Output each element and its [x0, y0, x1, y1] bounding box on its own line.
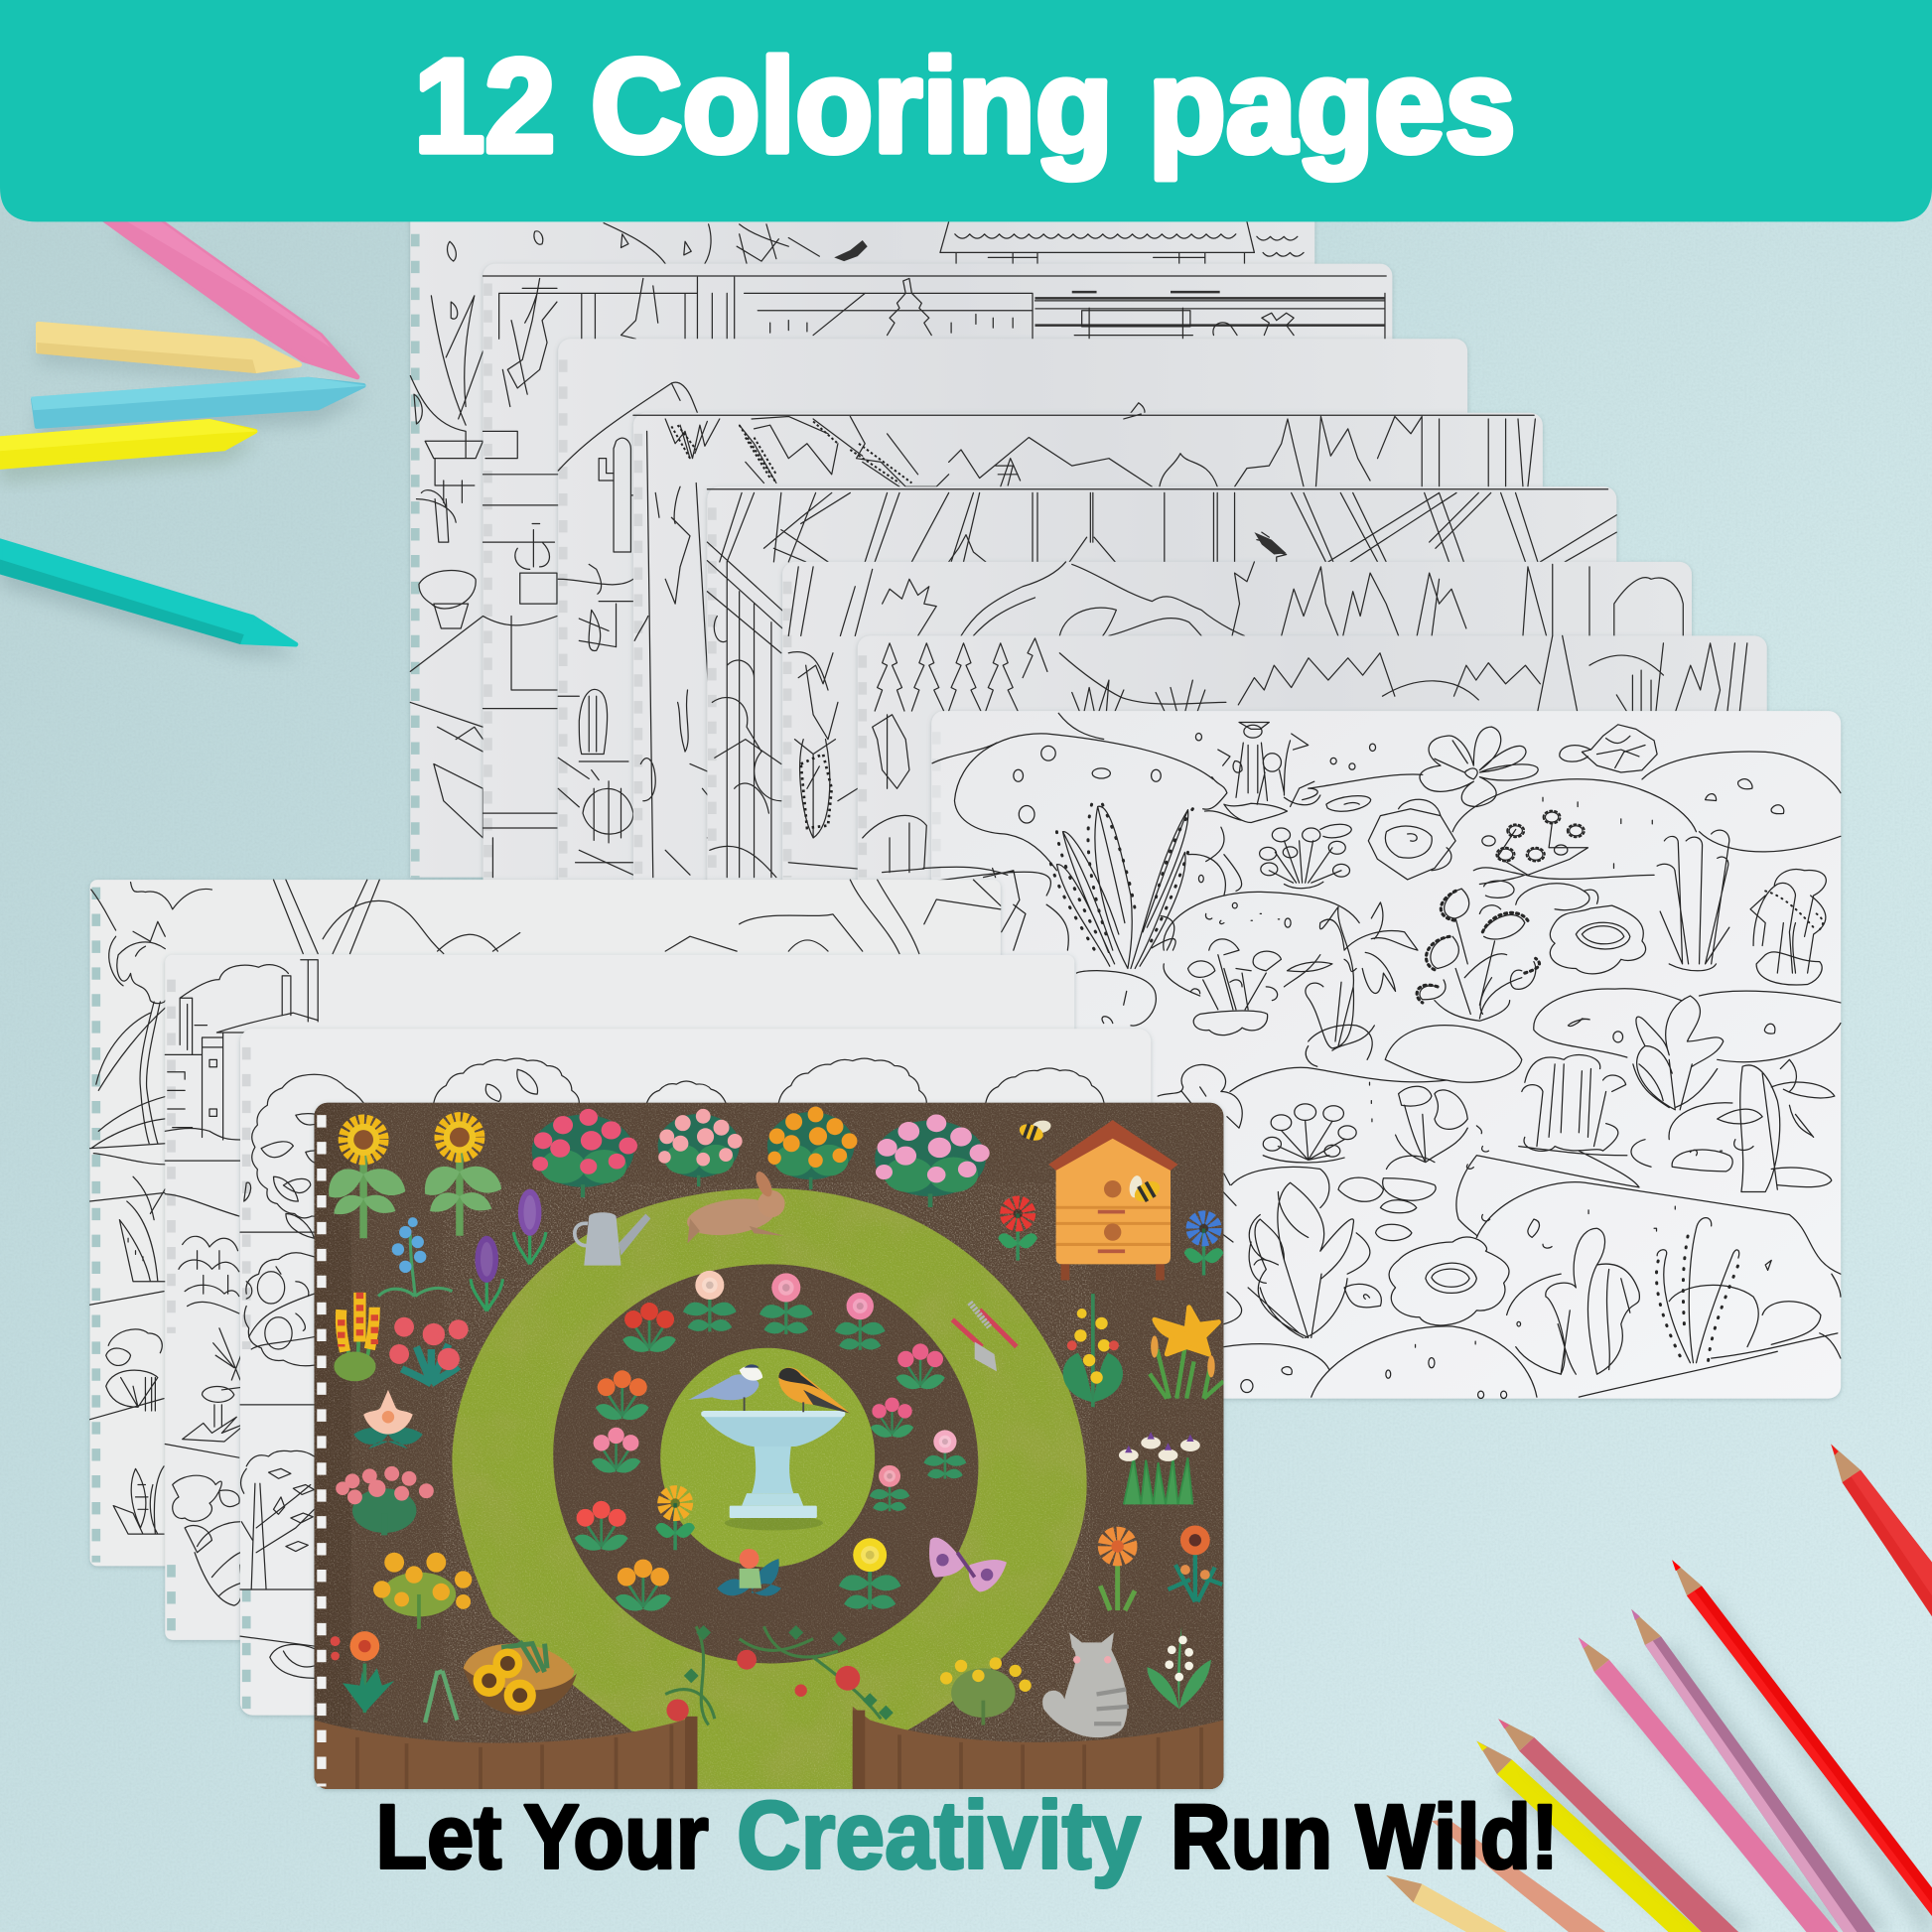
icon: hyacinth upper — [514, 1189, 546, 1264]
icon: blue flower top right — [1184, 1217, 1223, 1276]
page 12: colored garden page — [314, 1103, 1223, 1789]
succulent and flower — [1368, 799, 1455, 880]
icon: bird bath — [701, 1411, 845, 1530]
icon: forget-me-not — [378, 1217, 452, 1297]
page 2: greenhouse windows and bench — [483, 264, 1392, 950]
page 9: palm trees and hills — [90, 880, 1001, 1566]
pencil: mauve — [1631, 1609, 1891, 1932]
icon: bee on hive — [1119, 1166, 1164, 1208]
venus flytrap cluster — [1473, 812, 1587, 885]
crayons group — [0, 219, 369, 658]
back stack of coloring pages — [410, 191, 1841, 1399]
bottom contour — [1224, 1274, 1841, 1399]
icon: watering can — [575, 1212, 650, 1266]
rocks center and right — [1452, 752, 1841, 879]
pencil: salmon — [1432, 1819, 1605, 1932]
pencils group — [1386, 1445, 1932, 1932]
tagline: Let Your — [376, 1786, 709, 1887]
icon: white iris clump — [1119, 1432, 1200, 1504]
center green lawn — [660, 1348, 875, 1568]
page 7: pine forest and mountains — [858, 635, 1767, 1322]
sundew low — [1263, 1104, 1356, 1163]
icon: inner ring flowers — [575, 1271, 966, 1611]
icon: pink shrub — [658, 1109, 743, 1186]
icon: orange lily — [1150, 1308, 1223, 1399]
icon: pink flower cluster left — [336, 1466, 434, 1535]
big rock bottom right — [1476, 1182, 1841, 1274]
pencil: rose — [1498, 1719, 1756, 1932]
venus flytrap — [1420, 889, 1536, 1021]
icon: oriole bird — [778, 1367, 850, 1414]
sundew ball plant — [1260, 824, 1351, 889]
top banner — [0, 0, 1932, 221]
mushroom pitcher group — [1188, 939, 1281, 1035]
sundew plant — [1056, 806, 1188, 968]
crayon: light blue — [31, 377, 367, 441]
icon: rose bush — [532, 1109, 637, 1197]
fungi — [1546, 1228, 1639, 1374]
grass and ring speckle overlay — [444, 1182, 1090, 1789]
icon: poppy bottom left — [331, 1631, 394, 1713]
icon: yellow shrub bottom right — [940, 1657, 1032, 1725]
icon: lily of the valley — [1147, 1626, 1211, 1709]
pencil: pink — [1579, 1637, 1855, 1932]
tagline: Creativity — [737, 1780, 1141, 1888]
icon: sunflower right — [425, 1119, 501, 1236]
fence left — [314, 1717, 697, 1789]
page 11: round trees — [240, 1029, 1151, 1716]
fern — [1657, 1218, 1739, 1363]
flytrap low — [1396, 1086, 1467, 1163]
icon: lotus — [353, 1390, 423, 1449]
pitcher plants right — [1657, 830, 1822, 985]
pencil: cream — [1386, 1875, 1507, 1932]
calla bottom — [1248, 1182, 1353, 1337]
rafflesia bottom — [1389, 1237, 1509, 1325]
page 10: city buildings and garden — [165, 955, 1074, 1640]
nepenthes plant — [1287, 902, 1418, 1048]
pebbles — [1231, 1156, 1639, 1241]
icon: beehive — [1048, 1120, 1177, 1280]
icon: pruning shears — [425, 1671, 457, 1723]
inner soil ring — [553, 1264, 978, 1663]
icon: red rose cluster — [389, 1317, 469, 1384]
rocks mid right — [1534, 989, 1841, 1062]
icon: yellow shrub left — [373, 1553, 472, 1629]
icon: hyacinth lower — [471, 1236, 502, 1311]
pencil: yellow — [1476, 1741, 1719, 1932]
green spiral path — [444, 1182, 1097, 1789]
fence right — [853, 1707, 1223, 1789]
icon: gladiolus — [334, 1293, 376, 1381]
icon: red poppy lower right — [1169, 1525, 1222, 1601]
icon: orange shrub — [767, 1107, 857, 1189]
crayon: pink — [103, 219, 369, 387]
crayon: teal — [0, 541, 300, 658]
tagline — [376, 1780, 1559, 1888]
calla plant — [1633, 996, 1724, 1110]
crayon: yellow — [0, 419, 259, 483]
title: 12 Coloring pages — [414, 33, 1516, 181]
spiral binding holes on colored page — [318, 1115, 326, 1787]
icon: grey cat — [1042, 1632, 1129, 1737]
page 6: wooded hills and clouds — [782, 562, 1692, 1248]
icon: sunflower left — [329, 1121, 405, 1238]
icon: basket with sunflowers — [464, 1641, 577, 1716]
icon: foxglove — [1063, 1294, 1123, 1407]
page 1: garden house — [410, 191, 1314, 878]
rafflesia right — [1550, 905, 1646, 974]
page 3: mountain and cacti — [558, 339, 1467, 1026]
crayon: cream yellow — [37, 324, 306, 384]
icon: butterfly — [929, 1538, 1007, 1591]
rock center — [1152, 892, 1359, 996]
icon: red flower top right — [998, 1202, 1037, 1261]
page 8: carnivorous plants coloring page (front right) — [923, 711, 1841, 1399]
icon: teal leaf flower — [717, 1549, 781, 1596]
icon: orange flower lower right — [1100, 1534, 1135, 1610]
icon: rose vines bottom — [665, 1625, 894, 1725]
pencil: red middle — [1672, 1560, 1932, 1932]
glossy sheen — [314, 1103, 1223, 1789]
icon: bee upper — [1018, 1110, 1055, 1146]
icon: garden tools — [952, 1303, 1017, 1371]
pitcher cluster — [1203, 723, 1320, 823]
page 4: pine branches and distant mountains — [633, 413, 1543, 1099]
tagline: Run Wild! — [1171, 1786, 1559, 1887]
icon: pink peony bush — [875, 1114, 990, 1207]
lower stack of coloring pages — [90, 880, 1151, 1716]
icon: blue tit — [689, 1364, 762, 1411]
pencil: red right — [1831, 1445, 1932, 1616]
tall pitcher bog — [1522, 1055, 1626, 1151]
page 5: greenhouse roof frames — [707, 486, 1616, 1173]
rock low center — [1230, 1026, 1639, 1187]
nepenthes right — [1718, 1059, 1835, 1191]
left bits beside lower pages — [984, 868, 1242, 1242]
line art: rocks and plants on page 8 — [923, 713, 1841, 1399]
soil ground — [314, 1103, 1223, 1789]
icon: rabbit — [685, 1170, 785, 1243]
